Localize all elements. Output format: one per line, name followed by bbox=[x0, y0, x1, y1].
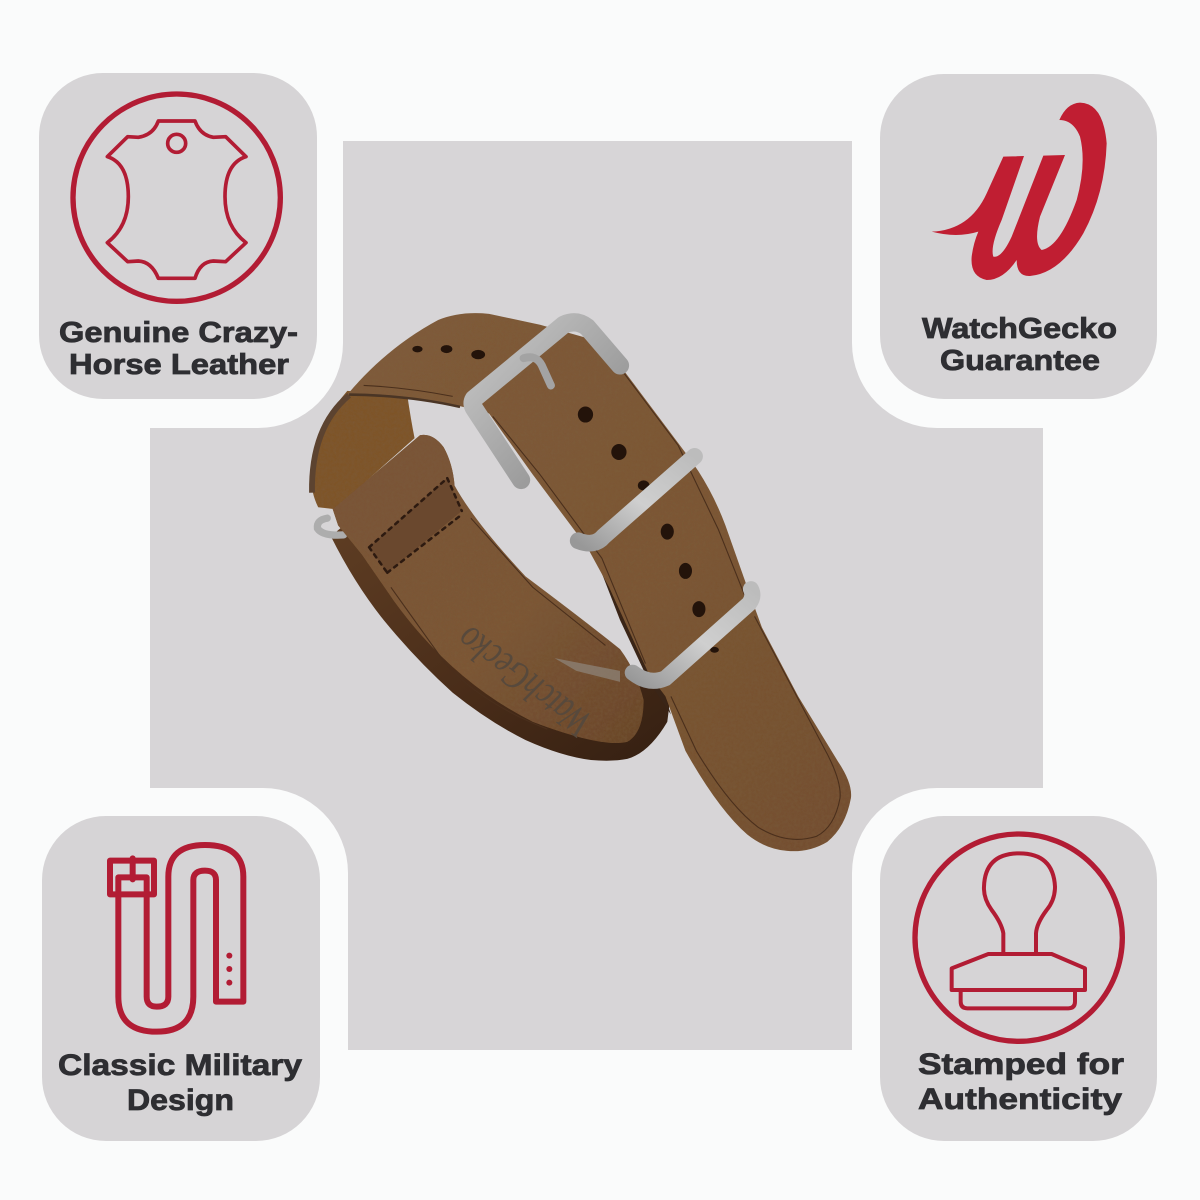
icon: WatchGecko W logo bbox=[932, 103, 1107, 280]
heading: Classic Military Design: Classic Military bbox=[58, 1049, 302, 1082]
heading: Genuine Crazy-Horse Leather: Horse Leather bbox=[69, 349, 289, 381]
suede interior of loop bbox=[311, 391, 415, 509]
strap inner lower face bbox=[333, 435, 644, 743]
icon: leather hide in circle bbox=[73, 94, 280, 301]
icon: rubber stamp in circle bbox=[915, 834, 1122, 1041]
rear strap layer between buckle and keepers bbox=[515, 442, 671, 715]
heading: WatchGecko Guarantee: WatchGecko bbox=[922, 313, 1117, 345]
strap holes bbox=[412, 345, 719, 653]
strap stitching lines bbox=[364, 351, 840, 839]
heading: Genuine Crazy-Horse Leather: Genuine Crazy- bbox=[59, 317, 298, 349]
loop inner rim bbox=[312, 395, 349, 493]
keeper end over suede bbox=[333, 435, 455, 573]
light streak on imprint bbox=[555, 658, 620, 682]
card background bbox=[39, 73, 317, 399]
heading: Stamped for Authenticity: Stamped for bbox=[918, 1048, 1124, 1081]
card background bbox=[42, 816, 320, 1141]
panel: genuine leather bbox=[39, 73, 317, 399]
keeper loop two bbox=[633, 589, 752, 681]
imprinted WatchGecko wordmark: WatchGecko bbox=[448, 617, 600, 747]
product photo: leather strap bbox=[311, 313, 851, 851]
keeper loop one bbox=[578, 456, 695, 543]
card background bbox=[880, 816, 1157, 1141]
heading: Stamped for Authenticity: Authenticity bbox=[918, 1083, 1122, 1116]
heading: WatchGecko Guarantee: Guarantee bbox=[940, 345, 1100, 377]
panel: stamped for authenticity bbox=[880, 816, 1157, 1141]
main strap band bbox=[348, 313, 851, 851]
strap back edge shadow bbox=[331, 525, 671, 761]
panel: military design bbox=[42, 816, 320, 1141]
card background bbox=[880, 74, 1157, 399]
buckle frame bbox=[473, 322, 620, 480]
heading: Classic Military Design bbox=[58, 1049, 302, 1117]
central grey backdrop bbox=[150, 141, 1043, 1050]
icon: looped belt bbox=[110, 845, 243, 1032]
heading: Classic Military Design: Design bbox=[127, 1084, 234, 1117]
rear ring bbox=[317, 518, 344, 535]
panel: WatchGecko guarantee bbox=[880, 74, 1157, 399]
buckle tongue bbox=[524, 357, 551, 385]
heading: WatchGecko Guarantee bbox=[922, 313, 1117, 377]
rim under upper band bbox=[349, 395, 460, 407]
heading: Genuine Crazy-Horse Leather bbox=[59, 317, 298, 381]
stitched keeper patch bbox=[369, 478, 462, 573]
heading: Stamped for Authenticity bbox=[918, 1048, 1124, 1116]
